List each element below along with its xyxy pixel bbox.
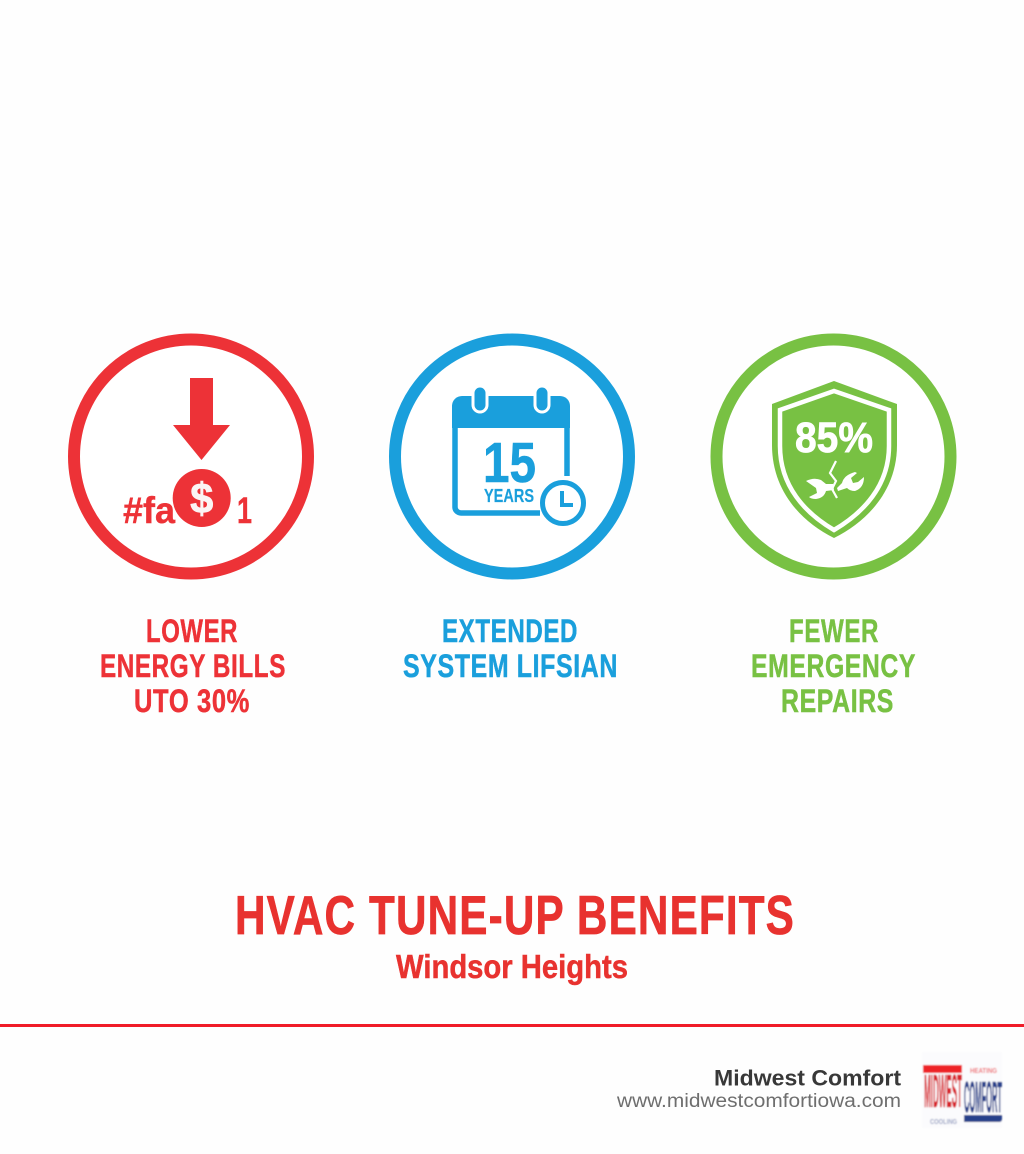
icon text: broken glyph label: #fa [123,490,175,531]
icon: calendar: YEARS [484,486,534,506]
logo [922,1052,1002,1128]
icon text: broken glyph label [123,490,252,531]
label: fewer emergency repairs: FEWER [789,613,879,649]
footer website: www.midwestcomfortiowa.com [616,1091,901,1112]
icon ring: red [74,340,308,574]
label: extended system lifespan [403,613,618,684]
subtitle: Windsor Heights [396,949,628,986]
panel: extended system lifespan [395,340,629,684]
label: fewer emergency repairs [751,613,916,719]
icon: broken wrench [806,461,864,499]
icon: down arrow [173,378,230,460]
label: lower energy bills: LOWER [146,613,238,649]
icon: shield [772,381,897,538]
panel: lower energy bills [74,340,308,719]
label: extended system lifespan: SYSTEM LIFSIAN [403,648,618,684]
icon ring: blue [395,340,629,574]
icon: calendar [452,386,570,513]
icon: shield: 85% [795,414,873,462]
label: extended system lifespan: EXTENDED [442,613,578,649]
icon: dollar coin [173,469,231,527]
label: lower energy bills [100,613,286,719]
panel: fewer emergency repairs [716,340,950,719]
icon: calendar: 15 [483,431,536,495]
logo: COOLING [930,1119,957,1126]
logo: HEATING [970,1068,997,1075]
icon text: broken glyph label: 1 [237,490,252,531]
label: lower energy bills: UTO 30% [134,683,250,719]
footer divider [0,1024,1024,1027]
footer company name: Midwest Comfort [714,1066,902,1090]
icon ring: green [716,340,950,574]
icon: clock [539,479,587,527]
label: fewer emergency repairs: REPAIRS [781,683,894,719]
title: HVAC TUNE-UP BENEFITS [235,884,795,946]
label: lower energy bills: ENERGY BILLS [100,648,286,684]
label: fewer emergency repairs: EMERGENCY [751,648,916,684]
icon: dollar coin: $ [190,475,213,523]
